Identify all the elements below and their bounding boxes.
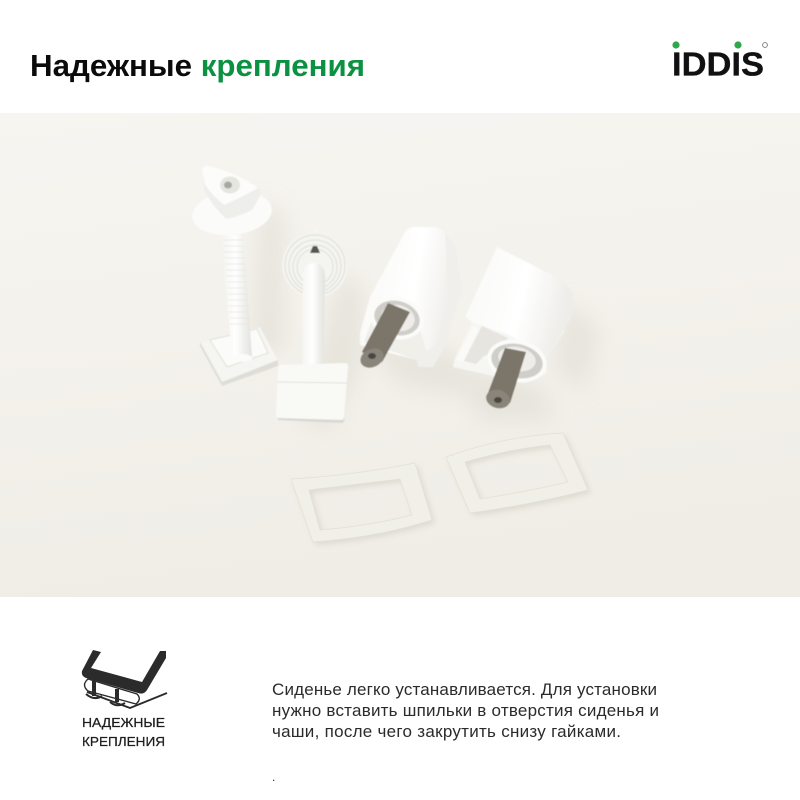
- footnote dot: .: [272, 770, 275, 784]
- product photo: [0, 113, 800, 597]
- left hinge: [357, 227, 462, 371]
- right hinge: [453, 247, 573, 411]
- right gasket: [446, 433, 591, 516]
- logo: IDDIS: IDDIS: [672, 46, 764, 82]
- icon label: КРЕПЛЕНИЯ: [82, 734, 165, 749]
- mounting bolt with wing nut: [190, 166, 278, 386]
- icon label: [82, 715, 165, 749]
- description text: [272, 680, 659, 741]
- description text: нужно вставить шпильки в отверстия сиденья и: [272, 701, 659, 720]
- title: Надежные крепления: [30, 48, 365, 83]
- photo shadows: [250, 200, 600, 430]
- icon label: НАДЕЖНЫЕ: [82, 715, 165, 730]
- icon: seat hinge: [82, 650, 167, 708]
- description text: Сиденье легко устанавливается. Для установки: [272, 680, 657, 699]
- description text: чаши, после чего закрутить снизу гайками.: [272, 722, 621, 741]
- mounting bolt with ribbed disc: [276, 227, 348, 423]
- left gasket: [291, 463, 435, 545]
